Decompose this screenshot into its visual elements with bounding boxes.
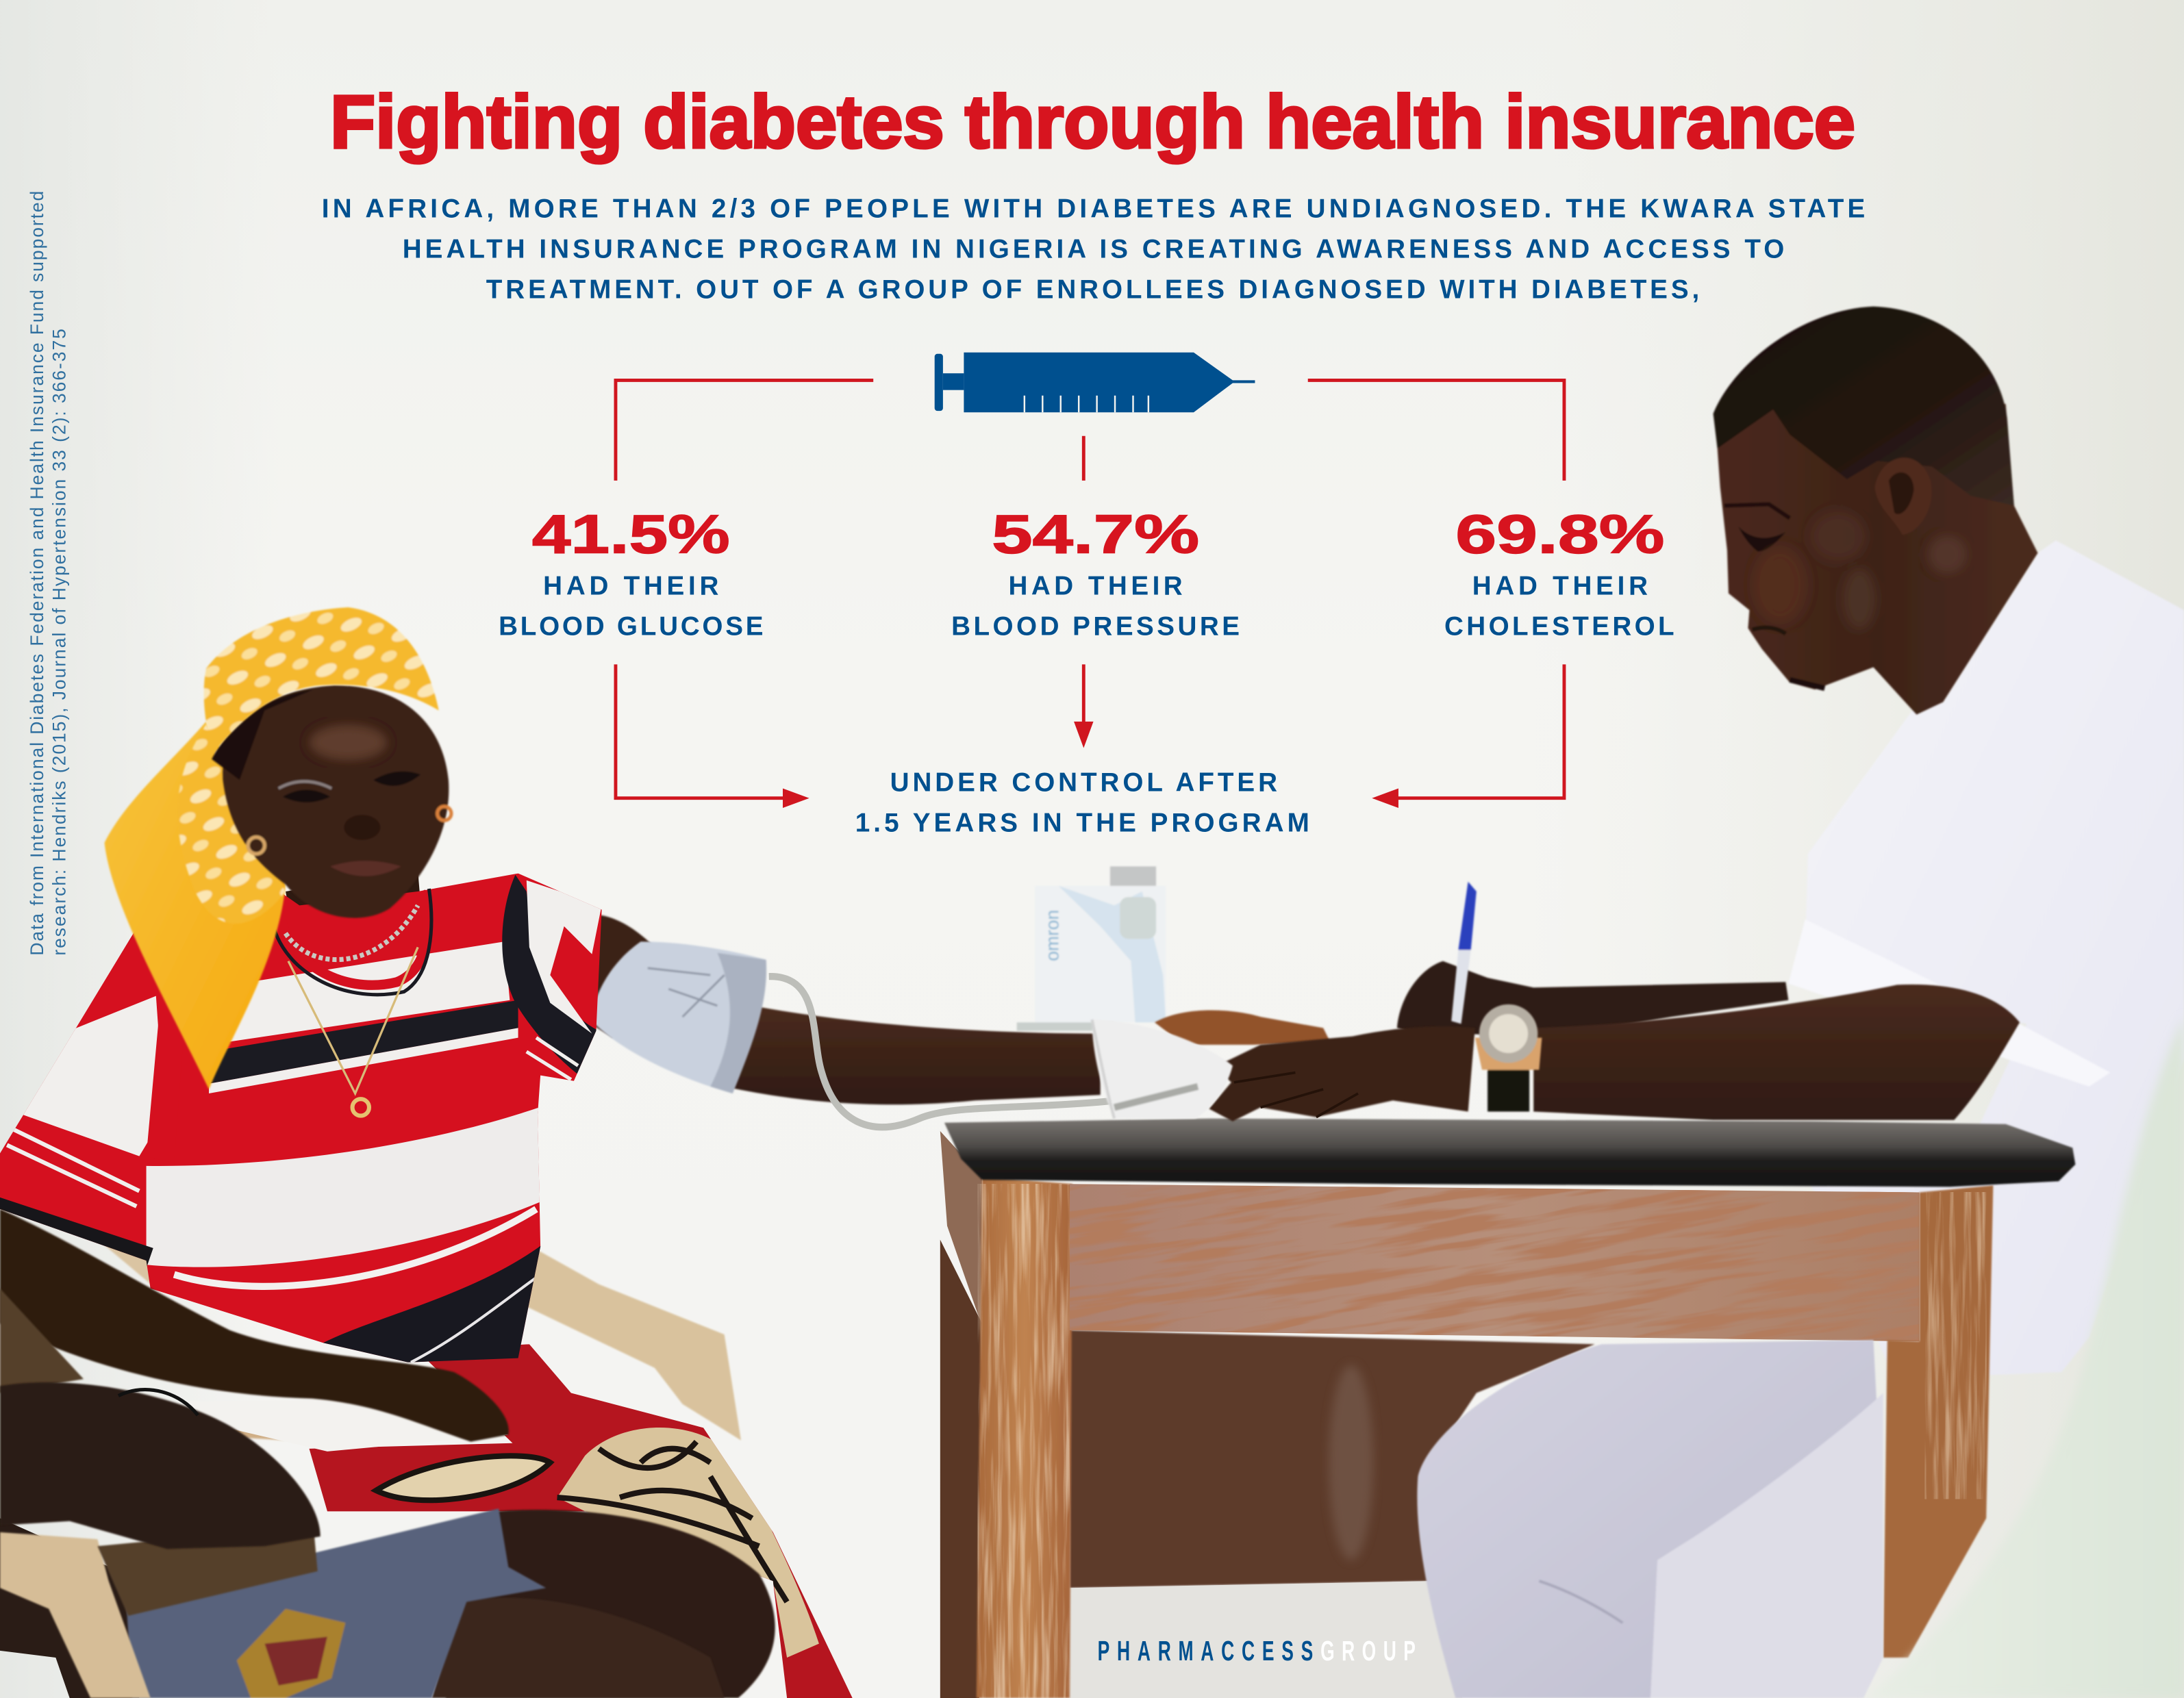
title: Fighting diabetes through health insurance xyxy=(330,81,1855,164)
intro line 3: TREATMENT. OUT OF A GROUP OF ENROLLEES DIAGNOSED WITH DIABETES, xyxy=(486,275,1699,304)
label: BLOOD GLUCOSE xyxy=(499,612,764,642)
face xyxy=(212,685,451,918)
label xyxy=(499,572,764,642)
blood pressure cuff xyxy=(590,941,766,1093)
table apron xyxy=(1070,1184,1920,1342)
wristband xyxy=(118,1390,198,1415)
label xyxy=(951,572,1240,642)
collar xyxy=(279,891,427,985)
nurse shirt xyxy=(1788,540,2184,1379)
neck xyxy=(286,871,425,975)
value: 41.5% xyxy=(532,504,730,565)
arrow: left to result xyxy=(616,664,809,808)
nurse near forearm xyxy=(1533,985,2020,1120)
striped shirt xyxy=(0,874,602,1363)
label: CHOLESTEROL xyxy=(1444,612,1674,642)
source line 1: Data from International Diabetes Federation and Health Insurance Fund supported xyxy=(27,191,47,956)
result text: 1.5 YEARS IN THE PROGRAM xyxy=(855,809,1309,838)
connector: syringe to 69.8% xyxy=(1308,380,1564,481)
table right leg xyxy=(1883,1185,1993,1658)
arrow: center to result xyxy=(1074,664,1094,748)
nurse sleeve xyxy=(1788,920,2110,1087)
connector: syringe to 41.5% xyxy=(616,380,873,481)
photo: table xyxy=(940,1117,2076,1698)
patient's hand under monitor xyxy=(1155,1010,1330,1045)
intro text xyxy=(322,194,1865,304)
jacket xyxy=(0,1289,318,1616)
value: 69.8% xyxy=(1455,504,1664,565)
stat: blood pressure xyxy=(951,504,1240,642)
value: 54.7% xyxy=(992,504,1199,565)
stat: blood glucose xyxy=(499,504,764,642)
pen xyxy=(1451,882,1477,1024)
chair xyxy=(95,1184,741,1441)
label: BLOOD PRESSURE xyxy=(951,612,1240,642)
result text: UNDER CONTROL AFTER xyxy=(890,768,1277,798)
intro line 1: IN AFRICA, MORE THAN 2/3 OF PEOPLE WITH DIABETES ARE UNDIAGNOSED. THE KWARA STATE xyxy=(322,194,1865,223)
blood pressure monitor xyxy=(1092,1019,1233,1119)
headscarf tail xyxy=(105,722,286,1089)
label: HAD THEIR xyxy=(1472,572,1648,601)
label: HAD THEIR xyxy=(1008,572,1183,601)
lower arm and hand xyxy=(0,1209,509,1442)
nurse head xyxy=(1714,307,2037,715)
chair arm xyxy=(0,1532,151,1698)
headscarf tail pattern xyxy=(177,724,286,924)
logo xyxy=(1098,1636,1416,1667)
nurse far arm with hand writing xyxy=(1397,961,1788,1038)
logo: PHARMACCESS xyxy=(1098,1636,1313,1667)
logo: GROUP xyxy=(1320,1636,1416,1667)
icon: syringe xyxy=(935,353,1255,412)
legs xyxy=(446,1510,775,1698)
photo: nurse hand and watch on table xyxy=(1209,1004,1542,1122)
result text xyxy=(855,768,1309,838)
intro line 2: HEALTH INSURANCE PROGRAM IN NIGERIA IS CREATING AWARENESS AND ACCESS TO xyxy=(403,234,1784,264)
stat: cholesterol xyxy=(1444,504,1674,642)
photo: nurse xyxy=(1155,307,2184,1379)
shorts xyxy=(125,1508,546,1698)
watch xyxy=(1475,1004,1542,1111)
floor under table xyxy=(1070,1581,1462,1698)
connector: syringe to 54.7% xyxy=(1083,436,1084,481)
nurse near hand xyxy=(1209,1026,1475,1122)
table front left leg xyxy=(977,1177,1072,1698)
label xyxy=(1444,572,1674,642)
source note xyxy=(27,191,70,956)
photo: blood pressure box on the table: omron xyxy=(1042,910,1063,961)
paper on lap xyxy=(181,1400,508,1452)
headscarf top xyxy=(204,607,439,755)
hand xyxy=(0,1382,321,1549)
photo: nurse trousers xyxy=(1417,1340,1883,1698)
skirt xyxy=(292,1337,877,1698)
table side apron and back leg xyxy=(940,1131,982,1326)
table underside xyxy=(1070,1330,1595,1588)
right forearm xyxy=(725,1006,1101,1104)
fingers xyxy=(1234,1073,1358,1117)
photo: patient xyxy=(0,607,1233,1698)
label: HAD THEIR xyxy=(543,572,719,601)
collar trim xyxy=(271,889,431,995)
body behind chair arm xyxy=(0,1519,139,1698)
necklaces xyxy=(286,905,418,1116)
photo: blurred foreground figure at right xyxy=(1866,1017,2184,1698)
source line 2: research: Hendriks (2015), Journal of Hypertension 33 (2): 366-375 xyxy=(49,329,70,956)
arrow: right to result xyxy=(1372,664,1564,808)
table top xyxy=(944,1119,2075,1187)
right upper arm xyxy=(557,915,655,1038)
lower leg xyxy=(431,1597,725,1698)
photo: foreground person xyxy=(0,1289,775,1698)
tube xyxy=(769,976,1198,1127)
photo: blood pressure box on the table xyxy=(1017,866,1166,1030)
